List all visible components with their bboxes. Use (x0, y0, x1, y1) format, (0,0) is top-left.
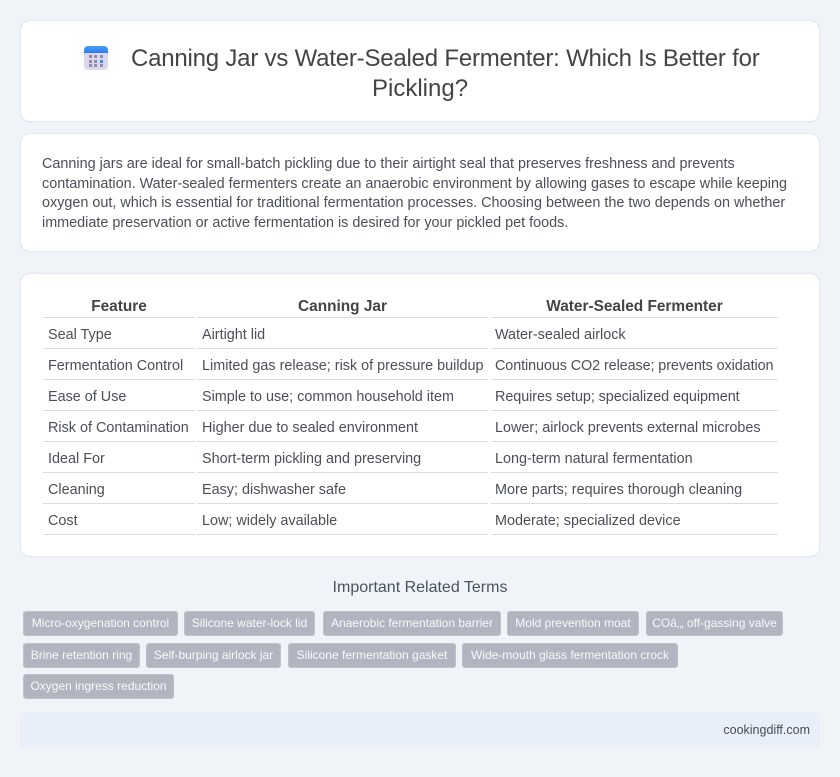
title: Canning Jar vs Water-Sealed Fermenter: Which Is Better for (131, 45, 760, 72)
chip (23, 643, 140, 668)
row: ideal for (48, 451, 693, 467)
row: cleaning (48, 482, 742, 498)
row: cost: Moderate; specialized device (495, 513, 681, 529)
row: cost: Cost (48, 513, 78, 529)
row: fermentation control (48, 358, 773, 374)
table header: Water-Sealed Fermenter (546, 298, 723, 315)
chip: Micro-oxygenation control (32, 616, 169, 630)
row: cleaning: More parts; requires thorough cleaning (495, 482, 742, 498)
row: seal type: Water-sealed airlock (495, 327, 626, 343)
row: ease of use: Requires setup; specialized equipment (495, 389, 740, 405)
table header: Feature (91, 298, 147, 315)
chip: Self-burping airlock jar (154, 648, 273, 662)
row: risk of contamination: Lower; airlock prevents external microbes (495, 420, 761, 436)
row: risk of contamination: Risk of Contamination (48, 420, 189, 436)
chip (23, 611, 178, 636)
panel: introduction (20, 133, 820, 252)
text block: introduction: immediate preservation or active fermentation is desired for your pickled pet foods. (42, 214, 568, 230)
row: cleaning: Cleaning (48, 482, 105, 498)
title (131, 45, 760, 102)
row: ease of use: Ease of Use (48, 389, 126, 405)
row: risk of contamination: Higher due to sealed environment (202, 420, 418, 436)
row: fermentation control: Fermentation Control (48, 358, 183, 374)
chip: Oxygen ingress reduction (30, 679, 167, 693)
chip (323, 611, 501, 636)
row: fermentation control: Limited gas release; risk of pressure buildup (202, 358, 484, 374)
row: seal type (48, 327, 626, 343)
chip (507, 611, 639, 636)
row: risk of contamination (48, 420, 761, 436)
row: cost (48, 513, 681, 529)
row: ease of use (48, 389, 740, 405)
chip (184, 611, 315, 636)
row: seal type: Airtight lid (202, 327, 265, 343)
text block: introduction: contamination. Water-sealed fermenters create an anaerobic environment by allowing gases to escape while keeping (42, 176, 787, 192)
text block: introduction: oxygen out, which is essential for traditional fermentation processes. Choosing between the two depends on whether (42, 195, 785, 211)
row: ideal for: Ideal For (48, 451, 105, 467)
row: ease of use: Simple to use; common household item (202, 389, 454, 405)
chip (23, 674, 174, 699)
chip (646, 611, 783, 636)
icon: calendar (84, 46, 108, 70)
row: seal type: Seal Type (48, 327, 112, 343)
chip: COâ‚„ off-gassing valve (652, 616, 777, 630)
footer bar (20, 713, 820, 747)
footer text: cookingdiff.com (723, 723, 810, 737)
row: cleaning: Easy; dishwasher safe (202, 482, 346, 498)
table header: Canning Jar (298, 298, 387, 315)
related terms chips (23, 611, 783, 699)
table: comparison (43, 298, 778, 535)
chip (462, 643, 678, 668)
chip (288, 643, 456, 668)
text block: introduction: Canning jars are ideal for small-batch pickling due to their airtight seal that preserves freshness and prevents (42, 156, 735, 172)
panel: title card (20, 20, 820, 122)
heading: important related terms: Important Related Terms (333, 579, 507, 596)
chip: Silicone water-lock lid (192, 616, 307, 630)
chip: Silicone fermentation gasket (297, 648, 447, 662)
chip: Brine retention ring (31, 648, 132, 662)
row: ideal for: Short-term pickling and preserving (202, 451, 421, 467)
row: fermentation control: Continuous CO2 release; prevents oxidation (495, 358, 773, 374)
chip: Anaerobic fermentation barrier (331, 616, 493, 630)
title: Pickling? (372, 75, 468, 102)
row: cost: Low; widely available (202, 513, 337, 529)
chip: Wide-mouth glass fermentation crock (471, 648, 669, 662)
text block: introduction (42, 156, 787, 230)
panel: comparison table card (20, 273, 820, 557)
chip: Mold prevention moat (515, 616, 631, 630)
row: ideal for: Long-term natural fermentation (495, 451, 693, 467)
table header (91, 298, 723, 315)
chip (146, 643, 281, 668)
